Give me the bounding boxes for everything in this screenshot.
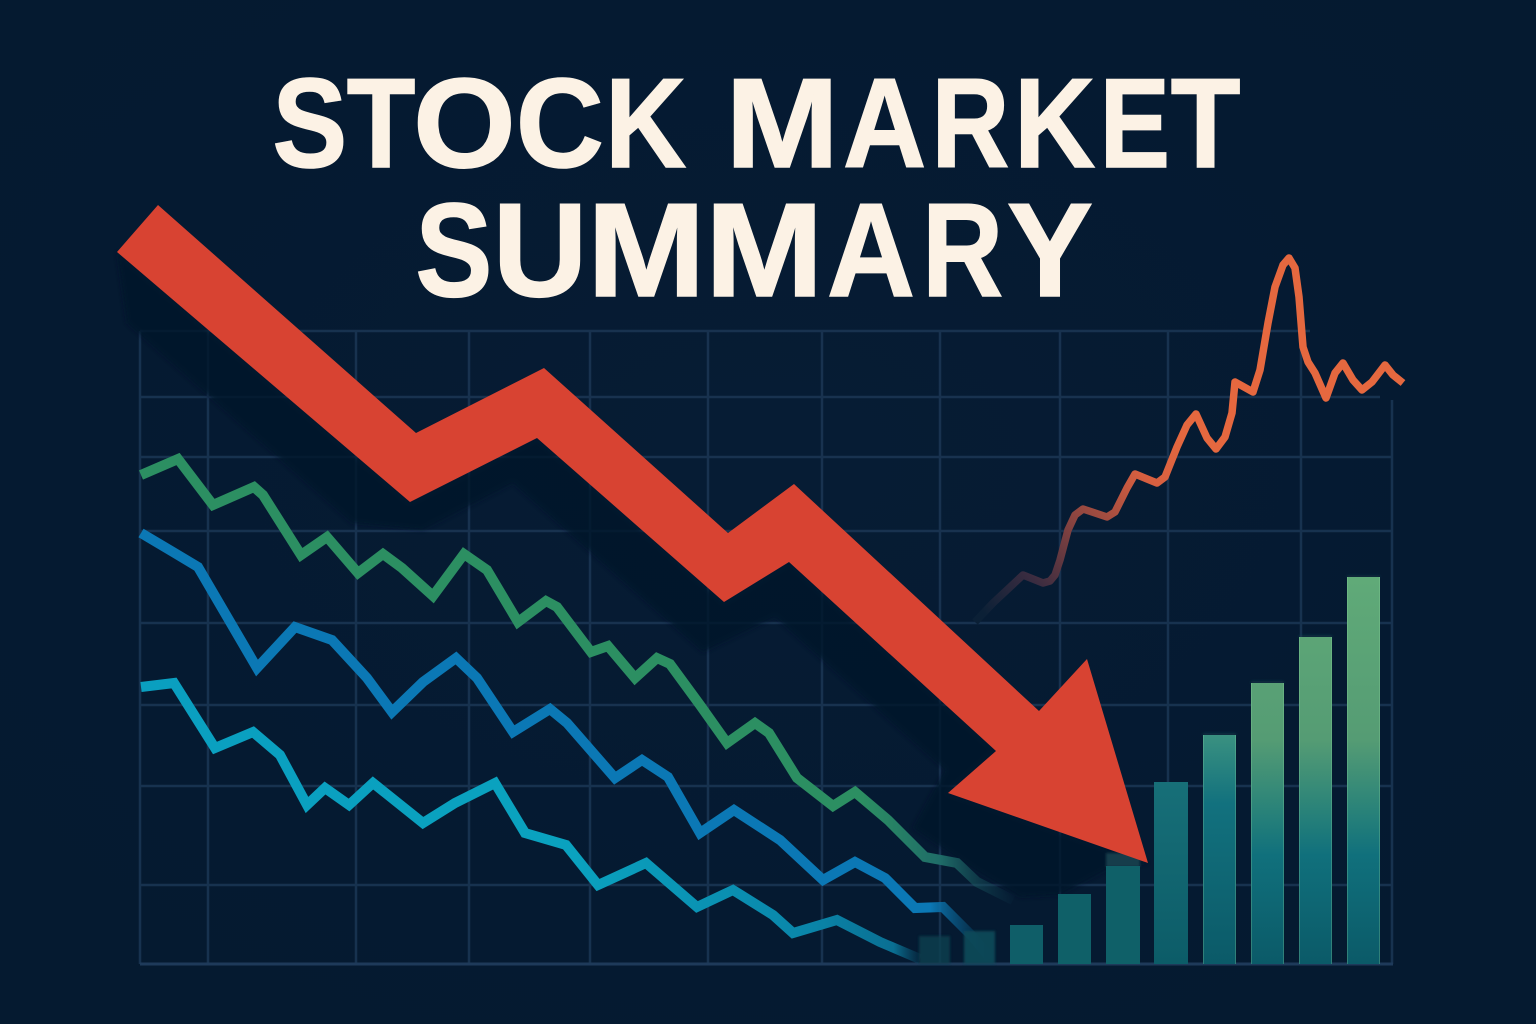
title: K (1014, 53, 1095, 195)
dark caps above bars (1106, 575, 1380, 867)
title: S (272, 53, 347, 195)
chart baseline (140, 962, 1393, 966)
teal bars (1058, 735, 1236, 964)
title: A (827, 175, 915, 325)
title: C (516, 53, 604, 195)
bar chart (919, 575, 1380, 964)
faded small bars (919, 925, 1043, 964)
title (272, 53, 1240, 325)
red rising line (975, 258, 1403, 622)
title: T (347, 53, 415, 195)
red down arrow (117, 205, 1148, 863)
green-to-teal bars (1251, 577, 1380, 964)
title: Y (1007, 175, 1093, 325)
green line (141, 459, 1013, 900)
title: R (922, 175, 1003, 325)
blue line (141, 533, 990, 958)
title: A (843, 53, 926, 195)
title: T (1171, 53, 1240, 195)
title: M (587, 175, 705, 325)
title: M (726, 53, 839, 195)
title: R (932, 53, 1009, 195)
bar edge highlights (1203, 577, 1380, 964)
chart grid (140, 331, 1392, 964)
cyan line (141, 683, 920, 959)
title: M (705, 175, 823, 325)
title: O (413, 53, 516, 195)
title: U (493, 175, 587, 325)
title: E (1100, 53, 1170, 195)
arrow shadow (117, 252, 1148, 897)
title: K (605, 53, 686, 195)
title: S (415, 175, 492, 325)
